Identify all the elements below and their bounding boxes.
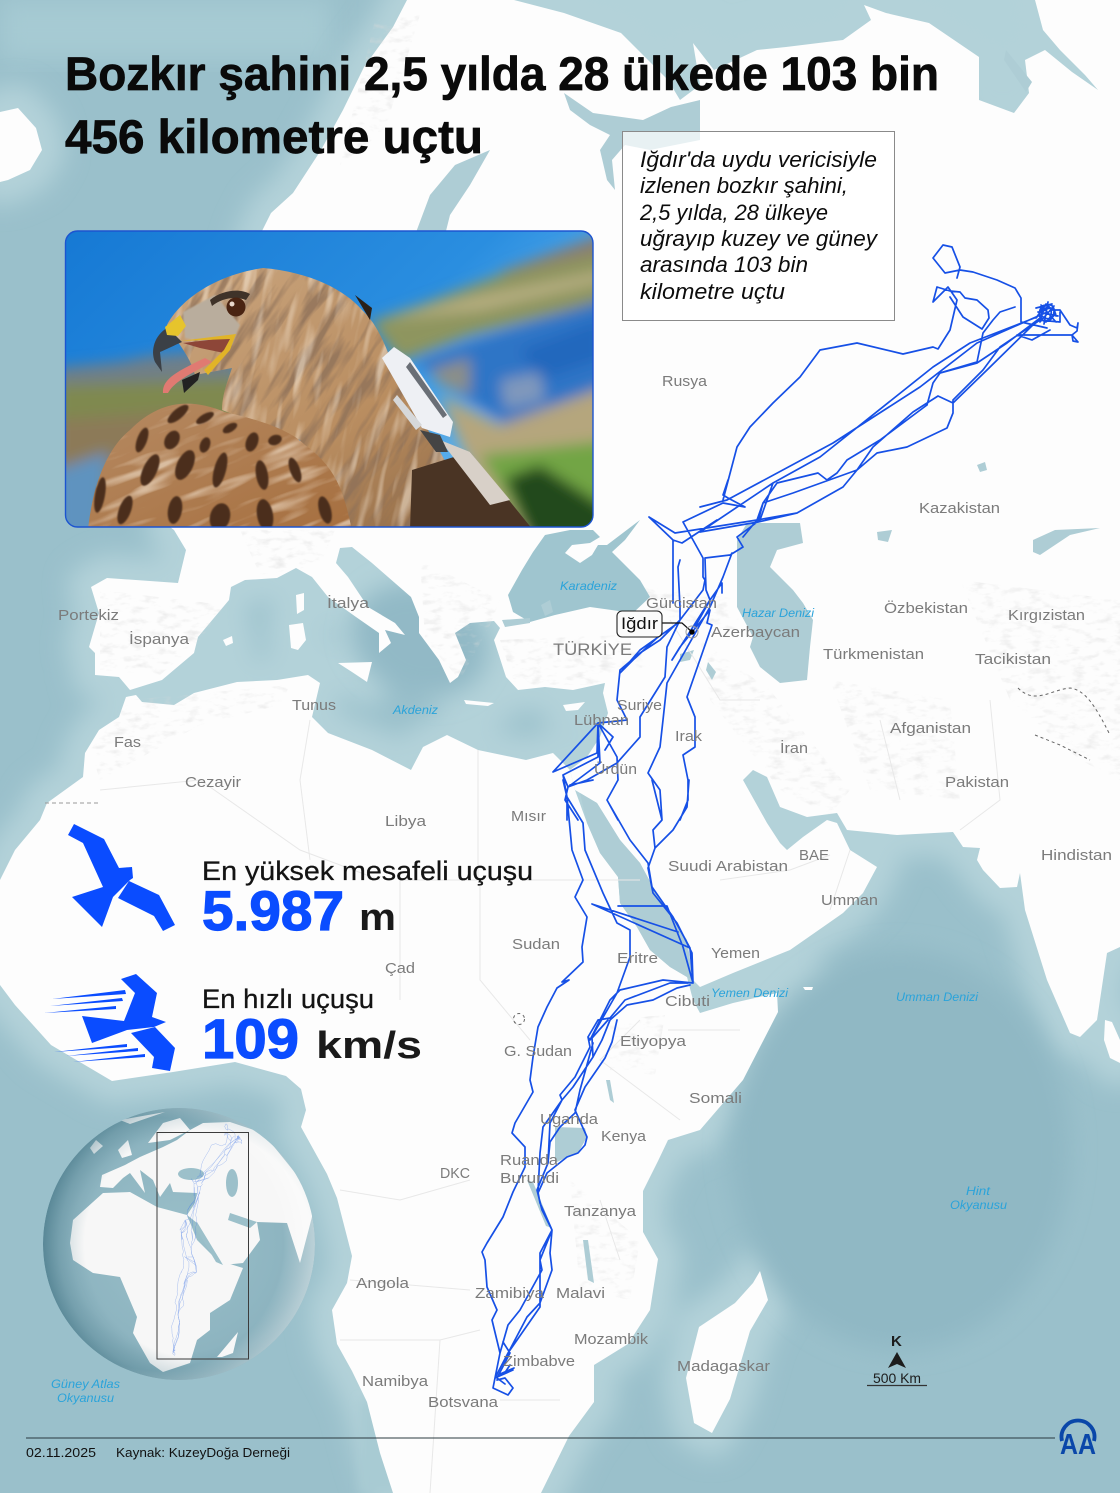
country labels: Burundi (500, 1171, 559, 1187)
country labels: Yemen (711, 946, 760, 962)
country labels: İran (780, 739, 808, 757)
footer (26, 1438, 1055, 1460)
country labels: Cezayir (185, 775, 241, 791)
country labels: Fas (114, 735, 141, 751)
stat: highest altitude (68, 824, 533, 942)
title (65, 47, 939, 163)
globe mini route (171, 1124, 242, 1355)
Iğdır callout: Iğdır (621, 614, 658, 633)
north arrow and scale (867, 1333, 927, 1386)
description box: arasında 103 bin (640, 252, 808, 277)
title: Bozkır şahini 2,5 yılda 28 ülkede 103 bin (65, 47, 939, 100)
country labels: Cibuti (665, 994, 710, 1010)
country labels: Uganda (540, 1112, 599, 1128)
sea labels: Hint (966, 1184, 991, 1198)
description box: 2,5 yılda, 28 ülkeye (639, 200, 828, 225)
description box: Iğdır'da uydu vericisiyle (640, 147, 877, 172)
hawk face (183, 295, 240, 345)
sea labels: Hazar Denizi (742, 606, 814, 620)
north arrow and scale: 500 Km (873, 1371, 921, 1386)
country labels: Botsvana (428, 1395, 499, 1411)
satellite transmitter (382, 347, 453, 437)
country labels: TÜRKİYE (553, 640, 632, 659)
hawk neck (167, 268, 444, 526)
country labels: Etiyopya (620, 1034, 687, 1050)
country labels: Portekiz (58, 608, 119, 624)
country labels: Ürdün (594, 760, 637, 778)
country labels: Hindistan (1041, 848, 1112, 864)
country labels: Mozambik (574, 1332, 649, 1348)
stat: highest altitude: 5.987 (202, 879, 344, 942)
country labels: Tanzanya (564, 1204, 637, 1220)
country labels: Kırgızistan (1008, 608, 1085, 624)
country labels: Zamibiya (475, 1286, 545, 1302)
country labels: Kenya (601, 1129, 647, 1145)
stat: fastest flight: En hızlı uçuşu (202, 984, 374, 1014)
country labels: Malavi (556, 1286, 605, 1302)
country labels: İspanya (129, 630, 190, 648)
icon: fast bird (44, 974, 175, 1071)
country labels: Özbekistan (884, 599, 968, 617)
Iğdır callout (617, 611, 698, 638)
title: 456 kilometre uçtu (65, 110, 483, 163)
AA logo (1060, 1420, 1096, 1461)
stat: highest altitude: En yüksek mesafeli uçuşu (202, 856, 533, 886)
stat: fastest flight: km/s (316, 1025, 422, 1067)
country labels: Lübnan (574, 713, 629, 729)
country labels: Rusya (662, 374, 708, 390)
country labels: Somali (689, 1091, 742, 1107)
inset globe (43, 1108, 317, 1380)
sea labels (51, 579, 1007, 1405)
country labels: Madagaskar (677, 1359, 770, 1375)
sea labels: Okyanusu (950, 1198, 1007, 1212)
country labels: Afganistan (890, 721, 971, 737)
country labels: Tunus (292, 698, 336, 714)
sea labels: Karadeniz (560, 579, 617, 593)
country labels: Azerbaycan (711, 625, 800, 641)
hawk wing (88, 404, 352, 530)
dashed border details (514, 688, 1110, 1024)
country borders (100, 620, 1000, 1493)
mountain texture (90, 15, 1120, 1300)
country labels: Umman (821, 893, 878, 909)
country labels: Türkmenistan (823, 647, 924, 663)
country labels: İtalya (327, 594, 370, 612)
stat: highest altitude: m (359, 897, 396, 939)
country labels: G. Sudan (504, 1044, 572, 1060)
AA logo: AA (1060, 1429, 1096, 1461)
sea labels: Güney Atlas (51, 1377, 120, 1391)
flight route (482, 245, 1078, 1395)
country labels: Eritre (617, 951, 658, 967)
footer: Kaynak: KuzeyDoğa Derneği (116, 1445, 290, 1460)
country labels: Mısır (511, 809, 546, 825)
north arrow and scale: K (891, 1333, 902, 1350)
description box: izlenen bozkır şahini, (640, 173, 848, 198)
sea labels: Yemen Denizi (711, 986, 788, 1000)
country labels: Gürcistan (646, 596, 717, 612)
country labels: Suriye (617, 698, 662, 714)
stat: fastest flight (44, 974, 422, 1071)
country labels: Tacikistan (975, 652, 1051, 668)
footer: 02.11.2025 (26, 1445, 96, 1460)
country labels (58, 374, 1112, 1411)
sea labels: Okyanusu (57, 1391, 114, 1405)
description box: uğrayıp kuzey ve güney (640, 226, 879, 251)
country labels: Pakistan (945, 775, 1009, 791)
description box (622, 132, 894, 320)
country labels: Libya (385, 814, 427, 830)
sea labels: Umman Denizi (896, 990, 978, 1004)
country labels: Suudi Arabistan (668, 859, 788, 875)
feather marks (92, 402, 334, 533)
country labels: Kazakistan (919, 501, 1000, 517)
seas and lakes (415, 50, 1100, 1283)
description box: kilometre uçtu (640, 279, 785, 304)
country labels: Namibya (362, 1374, 429, 1390)
country labels: BAE (799, 848, 829, 864)
photo: steppe buzzard with satellite transmitter (64, 230, 594, 528)
country labels: Sudan (512, 937, 560, 953)
icon: soaring bird (68, 824, 175, 931)
country labels: DKC (440, 1166, 470, 1182)
sea labels: Akdeniz (392, 703, 438, 717)
country labels: Angola (356, 1276, 410, 1292)
country labels: Irak (675, 729, 703, 745)
country labels: Ruanda (500, 1153, 559, 1169)
stat: fastest flight: 109 (202, 1007, 299, 1070)
country labels: Çad (385, 961, 415, 977)
country labels: Zimbabve (503, 1354, 575, 1370)
